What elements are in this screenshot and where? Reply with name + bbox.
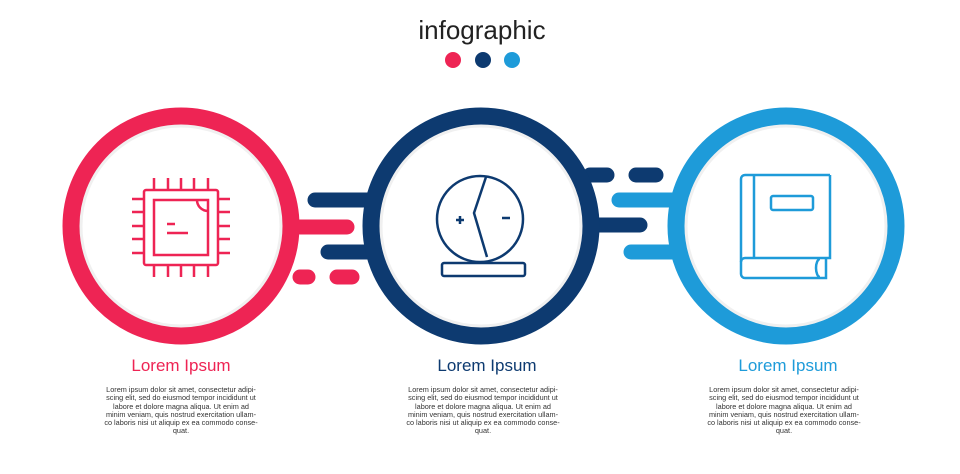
heading 2: Lorem Ipsum	[437, 356, 537, 375]
text 3: Lorem ipsum dolor sit amet, consectetur adipi-	[709, 385, 859, 394]
text 1: scing elit, sed do eiusmod tempor incididunt ut	[106, 393, 256, 402]
text 2: co laboris nisi ut aliquip ex ea commodo conse-	[406, 418, 560, 427]
text 1: quat.	[173, 426, 189, 435]
text 3: labore et dolore magna aliqua. Ut enim ad	[716, 402, 852, 411]
text 1: Lorem ipsum dolor sit amet, consectetur adipi-	[106, 385, 256, 394]
heading 1: Lorem Ipsum	[131, 356, 231, 375]
title: infographic	[418, 15, 546, 45]
connectors	[300, 175, 680, 277]
icon: pie/battery	[437, 176, 525, 276]
text 1	[104, 385, 258, 435]
circle light	[676, 116, 896, 336]
icon: book	[741, 175, 830, 278]
text 2: Lorem ipsum dolor sit amet, consectetur adipi-	[408, 385, 558, 394]
text 1: co laboris nisi ut aliquip ex ea commodo conse-	[104, 418, 258, 427]
text 2: scing elit, sed do eiusmod tempor incididunt ut	[408, 393, 558, 402]
heading 3: Lorem Ipsum	[738, 356, 838, 375]
text 3: minim veniam, quis nostrud exercitation ullam-	[709, 410, 859, 419]
circle dark	[371, 116, 591, 336]
text 3: quat.	[776, 426, 792, 435]
icon: chip	[132, 178, 230, 277]
text 2: quat.	[475, 426, 491, 435]
text 3: scing elit, sed do eiusmod tempor incididunt ut	[709, 393, 859, 402]
dots	[445, 52, 520, 68]
text 3: co laboris nisi ut aliquip ex ea commodo conse-	[707, 418, 861, 427]
circle red	[71, 116, 291, 336]
text 2: labore et dolore magna aliqua. Ut enim ad	[415, 402, 551, 411]
text 1: minim veniam, quis nostrud exercitation ullam-	[106, 410, 256, 419]
text 2: minim veniam, quis nostrud exercitation ullam-	[408, 410, 558, 419]
text 1: labore et dolore magna aliqua. Ut enim ad	[113, 402, 249, 411]
text 3	[707, 385, 861, 435]
text 2	[406, 385, 560, 435]
